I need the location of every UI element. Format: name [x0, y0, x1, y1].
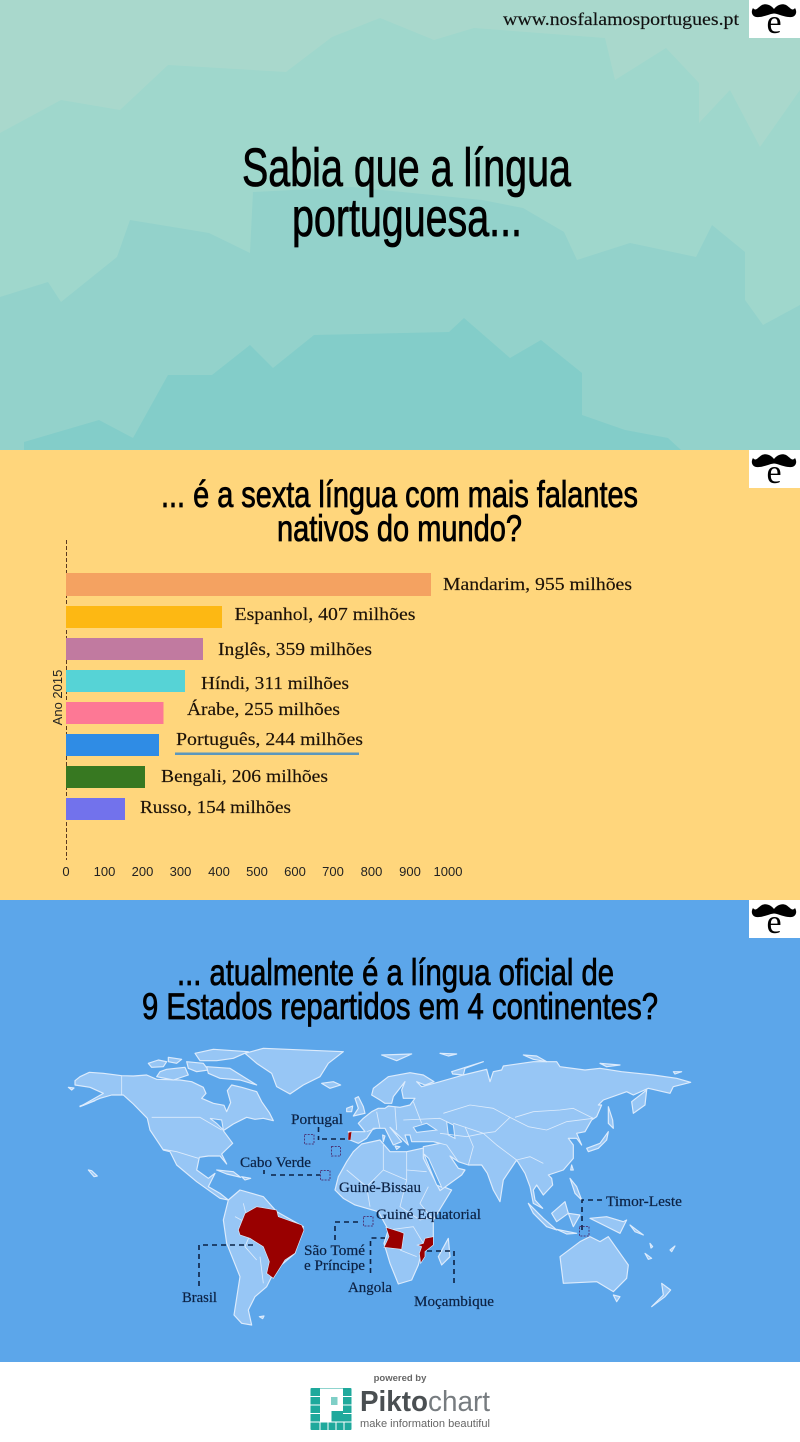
website address: www.nosfalamosportugues.pt [503, 9, 739, 29]
icon: moustache logo: e [766, 454, 782, 491]
icon: Piktochart logo [310, 1388, 352, 1430]
highlight: Moçambique [417, 1237, 433, 1263]
panel: official language [0, 900, 800, 1362]
icon: moustache logo [749, 0, 800, 41]
callout: Brasil [182, 1245, 255, 1306]
bar: Híndi: Híndi, 311 milhões [201, 673, 349, 693]
callout: Brasil: Brasil [182, 1290, 217, 1306]
bar: Árabe: Árabe, 255 milhões [187, 698, 340, 719]
heading: nativos do mundo? [277, 508, 522, 549]
callout: Portugal: Portugal [291, 1112, 343, 1128]
callout: Portugal [291, 1112, 347, 1140]
bar: Espanhol: Espanhol, 407 milhões [234, 604, 416, 624]
axis labels: Ano 2015 [50, 670, 65, 725]
bar chart [50, 540, 632, 879]
callout: Moçambique: Moçambique [414, 1294, 494, 1310]
bar: Mandarim: Mandarim, 955 milhões [443, 574, 632, 594]
bar: Espanhol [66, 604, 416, 628]
heading: ... é a sexta língua com mais falantes [161, 474, 638, 515]
bar: Inglês: Inglês, 359 milhões [218, 639, 372, 659]
bar: Árabe [66, 698, 340, 724]
panel: intro header [0, 0, 800, 450]
highlight: Portugal [348, 1132, 352, 1140]
North America [75, 1072, 273, 1200]
icon: moustache logo: e [766, 4, 782, 41]
axis labels [50, 670, 462, 879]
callout: Cabo Verde: Cabo Verde [240, 1155, 311, 1171]
wordmark: chart [428, 1386, 490, 1418]
South America [223, 1190, 303, 1325]
map callouts [182, 1112, 682, 1310]
title: Sabia que a língua [242, 138, 572, 198]
axis labels: 200 [132, 864, 153, 879]
bar: Híndi [66, 670, 349, 693]
axis labels: 900 [399, 864, 421, 879]
axis labels: 400 [208, 864, 230, 879]
callout: São Tomé e Príncipe [304, 1222, 365, 1274]
panel: footer [0, 1362, 800, 1442]
bar: Bengali: Bengali, 206 milhões [161, 766, 328, 786]
powered by text: powered by [374, 1373, 427, 1384]
world map [68, 1048, 691, 1325]
bar: Russo [66, 797, 291, 820]
title: portuguesa... [292, 188, 522, 248]
highlight: Brasil [238, 1207, 304, 1278]
axis labels: 100 [94, 864, 115, 879]
heading: ... atualmente é a língua oficial de [177, 952, 614, 993]
callout: Timor-Leste: Timor-Leste [606, 1194, 682, 1210]
dashed location squares [304, 1134, 589, 1236]
axis labels: 0 [62, 864, 70, 879]
callout: Guiné Equatorial: Guiné Equatorial [376, 1207, 481, 1223]
Greenland [245, 1048, 343, 1094]
heading: 9 Estados repartidos em 4 continentes? [142, 986, 658, 1027]
callout: Moçambique [414, 1251, 494, 1310]
wordmark [360, 1386, 490, 1430]
callout: São Tomé e Príncipe: e Príncipe [304, 1258, 365, 1274]
bar: Bengali [66, 766, 328, 788]
axis labels: 700 [322, 864, 344, 879]
wordmark: make information beautiful [360, 1418, 490, 1430]
callout: São Tomé e Príncipe: São Tomé [304, 1243, 365, 1259]
heading [142, 952, 658, 1027]
title [242, 138, 572, 248]
icon: moustache logo [749, 900, 800, 941]
callout: Angola [348, 1238, 393, 1296]
icon: moustache logo [749, 450, 800, 491]
callout: Timor-Leste [582, 1194, 682, 1230]
Eurasia [348, 1062, 691, 1208]
bar: Mandarim [66, 573, 632, 596]
axis labels: 1000 [434, 864, 462, 879]
bar: Português [66, 729, 363, 756]
heading [161, 474, 638, 549]
axis labels: 800 [361, 864, 382, 879]
axis labels: 300 [170, 864, 191, 879]
bar: Inglês [66, 638, 372, 660]
wordmark: Pikto [360, 1386, 428, 1418]
panel: native speakers [0, 450, 800, 900]
Africa [335, 1140, 452, 1284]
callout: Guiné-Bissau: Guiné-Bissau [339, 1180, 421, 1196]
axis labels: 600 [284, 864, 306, 879]
highlight: Angola [384, 1227, 404, 1249]
callout: Angola: Angola [348, 1280, 393, 1296]
callout: Cabo Verde [240, 1155, 320, 1175]
icon: moustache logo: e [766, 904, 782, 941]
bar: Russo: Russo, 154 milhões [140, 797, 291, 817]
axis labels: 500 [246, 864, 268, 879]
bar: Português: Português, 244 milhões [176, 729, 363, 749]
